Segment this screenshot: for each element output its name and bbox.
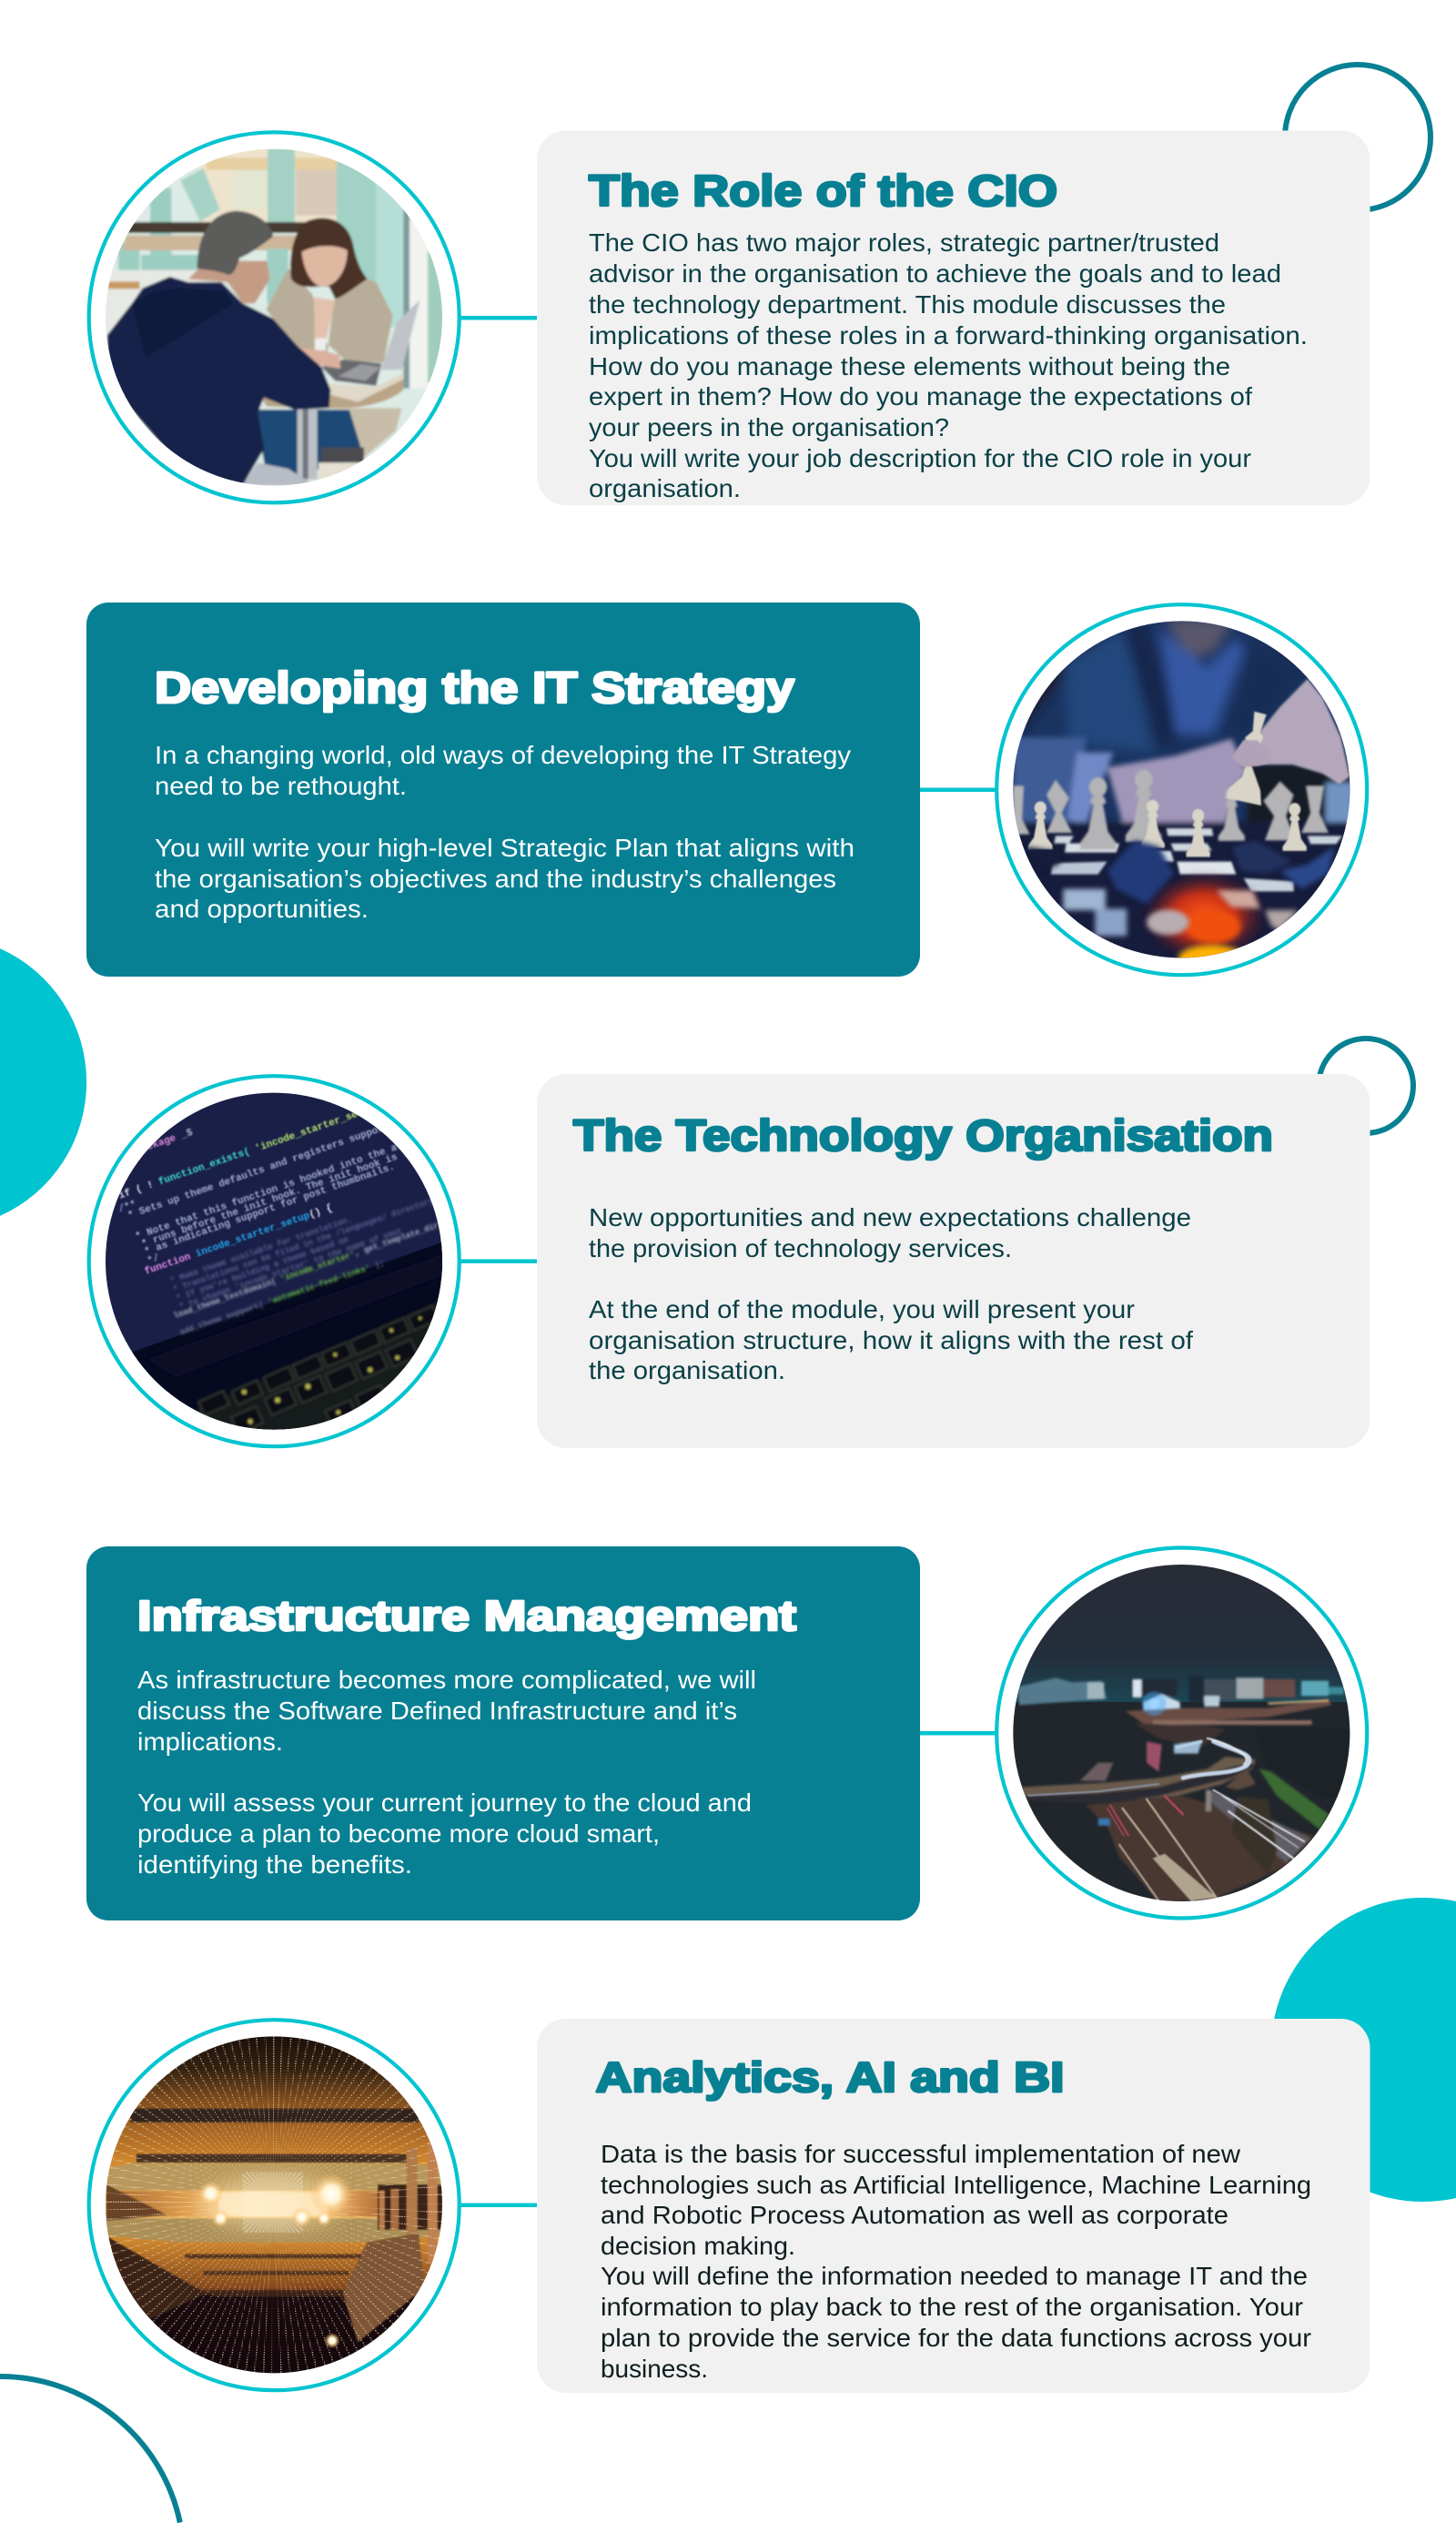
heading: The Technology Organisation	[573, 1112, 1273, 1160]
photo: code on a laptop screen: * runs before the init hook. The init hook is too	[140, 1144, 422, 1251]
body text: As infrastructure becomes more complicated, we will	[137, 1666, 756, 1694]
photo: code on a laptop screen: load_theme_textdomain( 'incode_starter', get_template_dir	[173, 1221, 440, 1321]
body text: produce a plan to become more cloud smart,	[137, 1819, 660, 1848]
panel: analytics	[537, 2019, 1370, 2393]
image ring	[89, 2020, 460, 2390]
photo: code on a laptop screen: * to change 'incode_starter' to the name of your	[178, 1226, 404, 1312]
body text	[589, 1203, 1193, 1384]
panel: role of the CIO	[537, 131, 1370, 505]
body text: implications.	[137, 1728, 283, 1756]
photo: city highway at night	[1010, 1563, 1353, 1909]
heading: Infrastructure Management	[137, 1592, 796, 1639]
decoration: bottom-left ring	[0, 2376, 180, 2523]
image ring	[89, 1076, 460, 1446]
body text: You will write your job description for the CIO role in your	[589, 444, 1251, 472]
body text: identifying the benefits.	[137, 1850, 412, 1879]
module 2: Developing the IT Strategy	[86, 603, 1367, 977]
decoration: top-right ring	[1285, 65, 1431, 210]
body text: expert in them? How do you manage the expectations of	[589, 382, 1252, 410]
body text: decision making.	[601, 2232, 795, 2260]
panel: infrastructure management	[86, 1546, 920, 1920]
panel: IT strategy	[86, 603, 920, 977]
module 3: The Technology Organisation	[89, 1059, 1370, 1448]
lights	[198, 2173, 352, 2348]
photo: code on a laptop screen: * If you're building a theme based on	[175, 1235, 349, 1303]
photo: code on a laptop screen: add_theme_support( 'automatic-feed-links' );	[178, 1259, 386, 1337]
module 1: The Role of the CIO	[89, 131, 1370, 505]
photo: code on a laptop screen: if ( ! function_exists( 'incode_starter_setup	[117, 1103, 377, 1201]
body text	[601, 2140, 1311, 2383]
connector line	[915, 788, 996, 792]
photo: code on a laptop screen: * Make theme available for translation.	[169, 1215, 353, 1286]
module 4: Infrastructure Management	[86, 1546, 1367, 1920]
connector line	[460, 2203, 541, 2207]
image ring	[996, 604, 1367, 975]
photo: data lights in an atrium	[103, 2034, 446, 2377]
body text: organisation.	[589, 474, 741, 502]
decoration: left filled circle	[0, 948, 86, 1216]
heading: Analytics, AI and BI	[595, 2053, 1065, 2101]
connector line	[915, 1731, 996, 1735]
body text	[155, 741, 854, 923]
body text	[137, 1666, 756, 1879]
photo: hand moving a chess piece	[1010, 619, 1356, 971]
body text: You will assess your current journey to the cloud and	[137, 1788, 752, 1817]
image ring	[89, 132, 460, 502]
photo: code on a laptop screen: * Note that this function is hooked into the after	[134, 1135, 421, 1243]
body text: organisation structure, how it aligns with the rest of	[589, 1326, 1193, 1354]
photo: code on a laptop screen: /**	[117, 1200, 138, 1216]
body text: New opportunities and new expectations challenge	[589, 1203, 1191, 1231]
photo: code on a laptop screen: */	[147, 1252, 161, 1267]
body text: Data is the basis for successful implementation of new	[601, 2140, 1241, 2168]
body text: At the end of the module, you will present your	[589, 1295, 1135, 1323]
body text: and Robotic Process Automation as well as corporate	[601, 2201, 1228, 2229]
photo: code on a laptop screen	[106, 1092, 442, 1430]
heading: The Role of the CIO	[589, 167, 1057, 216]
body text: the organisation’s objectives and the industry’s challenges	[155, 865, 836, 893]
body text: technologies such as Artificial Intelligence, Machine Learning	[601, 2171, 1311, 2199]
image ring	[996, 1547, 1367, 1919]
body text: need to be rethought.	[155, 772, 407, 800]
body text: business.	[601, 2355, 708, 2383]
decoration: middle-right ring	[1319, 1039, 1413, 1133]
body text: implications of these roles in a forward-thinking organisation.	[589, 321, 1308, 350]
body text: plan to provide the service for the data functions across your	[601, 2324, 1311, 2352]
photo: code on a laptop screen: Package _$	[135, 1127, 195, 1157]
connector line	[460, 316, 541, 320]
body text	[589, 228, 1308, 502]
body text: How do you manage these elements without being the	[589, 352, 1230, 380]
body text: In a changing world, old ways of developing the IT Strategy	[155, 741, 851, 769]
photo: code on a laptop screen: * Translations can be filed in the /languages/ directory	[172, 1196, 435, 1294]
body text: You will write your high-level Strategic Plan that aligns with	[155, 834, 854, 862]
heading: Developing the IT Strategy	[155, 664, 794, 713]
photo: two colleagues at a laptop	[103, 146, 446, 489]
body text: the technology department. This module discusses the	[589, 290, 1226, 319]
body text: the organisation.	[589, 1356, 785, 1384]
body text: advisor in the organisation to achieve the goals and to lead	[589, 259, 1281, 288]
decoration: lower-right filled circle	[1271, 1898, 1456, 2202]
body text: The CIO has two major roles, strategic partner/trusted	[589, 228, 1219, 257]
body text: the provision of technology services.	[589, 1234, 1012, 1262]
body text: You will define the information needed to manage IT and the	[601, 2262, 1308, 2290]
body text: information to play back to the rest of the organisation. Your	[601, 2293, 1303, 2321]
photo: code on a laptop screen: * Sets up theme defaults and registers support	[126, 1121, 391, 1221]
panel: technology organisation	[537, 1074, 1370, 1448]
body text: discuss the Software Defined Infrastructure and it’s	[137, 1697, 737, 1725]
module 5: Analytics, AI and BI	[89, 2019, 1370, 2393]
photo: code on a laptop screen: * as indicating support for post thumbnails.	[143, 1161, 397, 1258]
photo: code on a laptop screen: function incode_starter_setup() {	[143, 1203, 334, 1278]
connector line	[460, 1260, 541, 1263]
body text: your peers in the organisation?	[589, 413, 949, 441]
body text: and opportunities.	[155, 895, 369, 923]
